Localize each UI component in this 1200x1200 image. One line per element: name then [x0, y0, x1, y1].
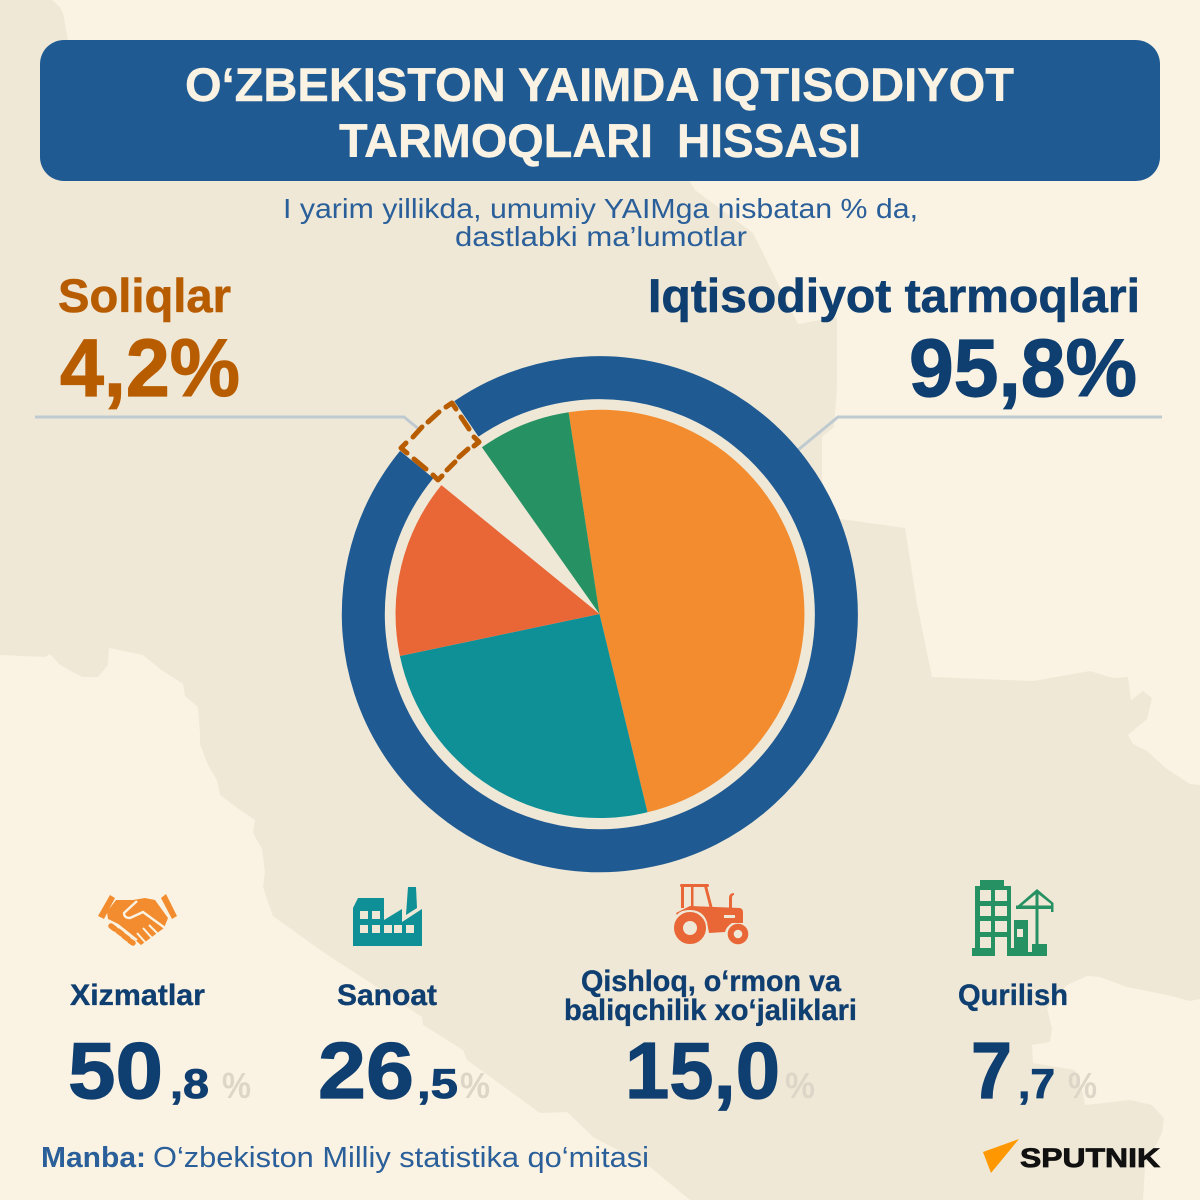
dashed box: taxes segment [401, 403, 479, 480]
slice: services [569, 410, 804, 812]
slice: agriculture [396, 485, 600, 656]
subtitle: I yarim yillikda, umumiy YAIMga nisbatan % da, [283, 193, 918, 224]
stat: services [68, 979, 251, 1115]
stat: agriculture: 15,0 [625, 1026, 780, 1115]
stat: construction [958, 979, 1097, 1115]
donut ring: economic sectors share [363, 378, 836, 851]
stat: construction: % [1068, 1065, 1097, 1106]
callout: economic sectors [648, 269, 1140, 414]
stat: services: 50 [68, 1026, 163, 1115]
callout: economic sectors: Iqtisodiyot tarmoqlari [648, 269, 1140, 322]
stat: agriculture: % [785, 1065, 815, 1106]
icon: handshake [98, 894, 177, 945]
leader line: sectors [798, 417, 1162, 450]
stat: construction: 7 [971, 1026, 1012, 1115]
icon: construction building and crane [972, 880, 1054, 956]
stat: industry [318, 979, 490, 1115]
stat: agriculture: baliqchilik xo‘jaliklari [564, 994, 857, 1027]
title banner: O‘ZBEKISTON YAIMDA IQTISODIYOT [185, 58, 1014, 111]
stat: construction: Qurilish [958, 979, 1068, 1012]
logo: Sputnik: SPUTNIK [1020, 1143, 1161, 1173]
stat: industry: 26 [318, 1026, 414, 1115]
subtitle [283, 193, 918, 252]
stat: construction: ,7 [1018, 1060, 1055, 1107]
subtitle: dastlabki ma’lumotlar [455, 221, 747, 252]
title banner: TARMOQLARI [339, 114, 653, 167]
stat: services: Xizmatlar [70, 979, 205, 1012]
title banner: HISSASI [677, 114, 861, 167]
callout: economic sectors: 95,8% [909, 323, 1137, 414]
stat: services: % [222, 1065, 251, 1106]
stat: services: ,8 [170, 1060, 209, 1107]
source: Manba: [41, 1142, 146, 1174]
leader line: taxes [35, 417, 420, 430]
title banner [40, 40, 1160, 181]
stat: industry: ,5 [417, 1060, 458, 1107]
icon: tractor [676, 884, 745, 941]
stat: industry: Sanoat [337, 979, 437, 1012]
logo: Sputnik [983, 1139, 1161, 1173]
icon: factory [353, 887, 422, 946]
stat: industry: % [460, 1065, 490, 1106]
callout: taxes: Soliqlar [58, 269, 231, 322]
slice: construction [482, 412, 600, 614]
stat: agriculture: Qishloq, o‘rmon va [581, 965, 841, 998]
slice: industry [400, 614, 648, 818]
source: O‘zbekiston Milliy statistika qo‘mitasi [153, 1142, 649, 1174]
pie chart [396, 410, 804, 818]
callout: taxes [58, 269, 240, 414]
stat: agriculture [564, 965, 857, 1115]
callout: taxes: 4,2% [60, 323, 240, 414]
